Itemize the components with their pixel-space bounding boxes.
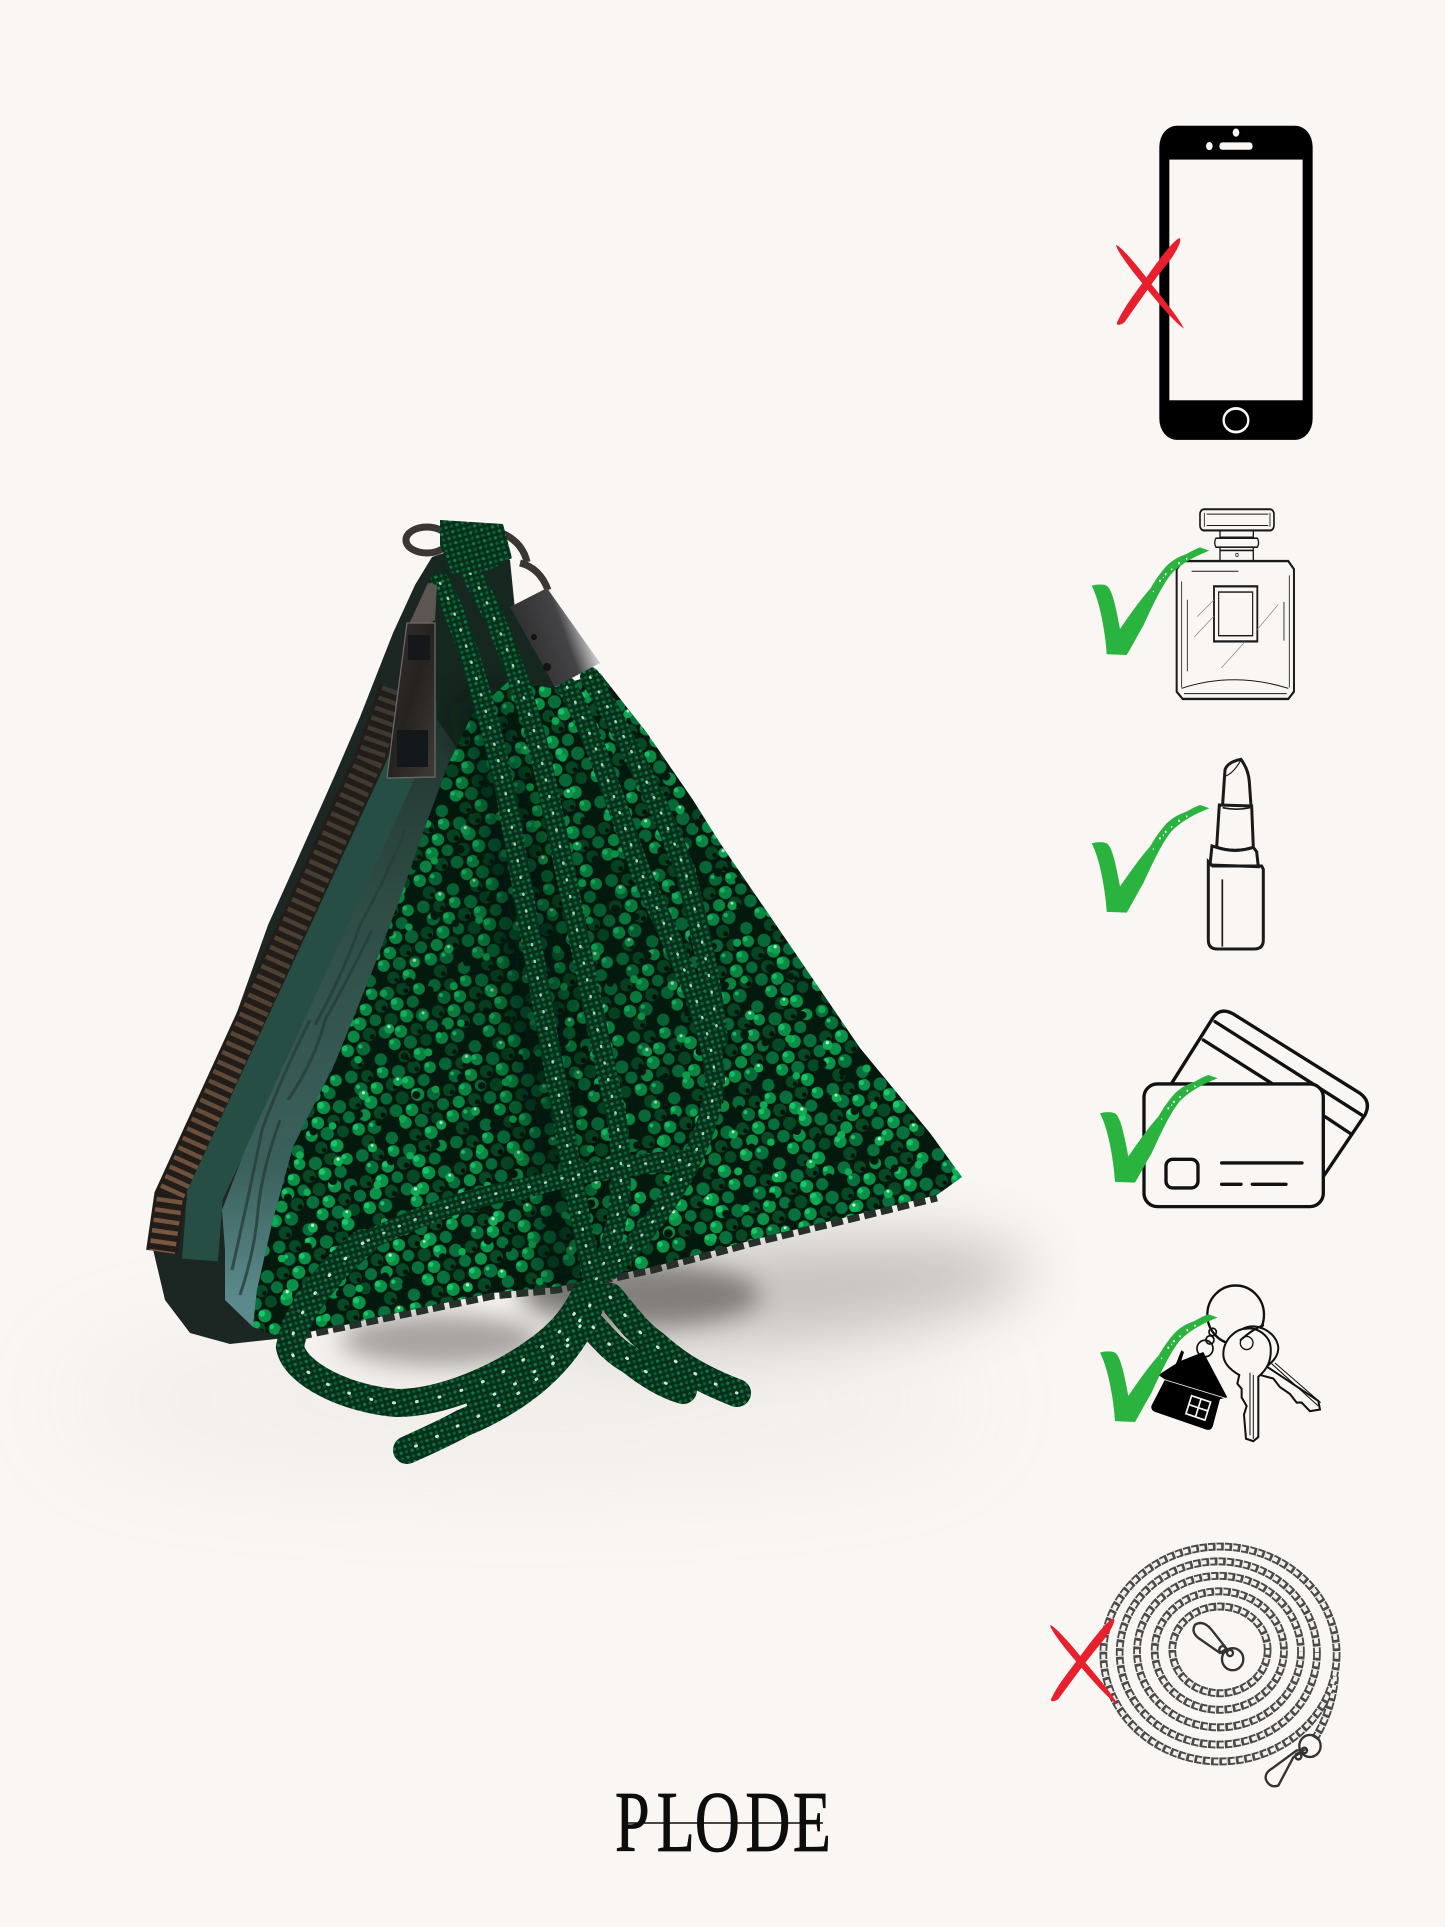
- green check: cards allowed: [1100, 1075, 1218, 1183]
- icon: perfume bottle: [1177, 509, 1294, 699]
- bag shadow: [60, 1219, 1033, 1460]
- red cross: phone does not fit: [1116, 238, 1184, 329]
- apex fabric behind cords: [432, 550, 640, 820]
- red cross: chain not included: [1050, 1618, 1118, 1705]
- zipper slider and pull: [387, 583, 437, 778]
- metal cord cap: [510, 588, 600, 687]
- product: green rhinestone pyramid bag: [152, 520, 962, 1450]
- icon: coiled metal chain: [1103, 1547, 1337, 1786]
- green check: perfume allowed: [1092, 547, 1209, 655]
- dark zipper backing: [152, 557, 500, 1344]
- icon: lipstick: [1208, 759, 1263, 949]
- top rings: [406, 527, 548, 590]
- end clasp: [1266, 1735, 1321, 1786]
- rhinestone body: [253, 673, 962, 1340]
- logo: PLODE: PLODE: [615, 1774, 831, 1871]
- icon: phone: [1159, 126, 1313, 440]
- green check: keys allowed: [1100, 1314, 1218, 1422]
- top strap knot: [440, 520, 512, 575]
- zipper tape: [200, 715, 425, 1260]
- inner teal fabric: [222, 640, 480, 1327]
- icon: house keychain with keys: [1151, 1285, 1321, 1441]
- inner clasp: [1193, 1623, 1243, 1670]
- zipper teeth: [162, 690, 395, 1252]
- green check: lipstick allowed: [1092, 805, 1209, 913]
- rhinestone cords: [290, 573, 737, 1450]
- icon: credit cards: [1144, 1011, 1367, 1207]
